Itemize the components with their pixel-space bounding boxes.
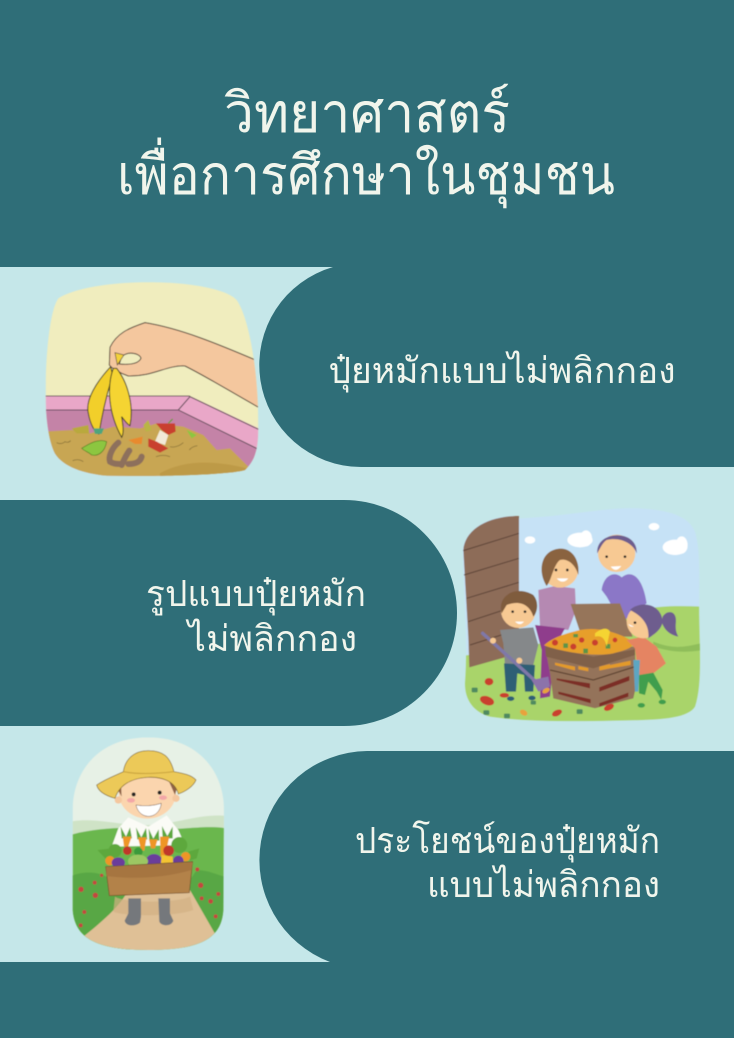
panel: row 1 pill: [259, 267, 734, 467]
text: row 2 label: [146, 573, 366, 659]
text: row 1 label: ปุ๋ยหมักแบบไม่พลิกกอง: [328, 350, 676, 393]
title: [117, 82, 615, 209]
text: row 2 label: รูปแบบปุ๋ยหมัก: [146, 573, 366, 616]
icon: hand dropping banana peel on compost: [45, 282, 259, 477]
text: row 3 label: [355, 820, 660, 905]
text: row 3 label: แบบไม่พลิกกอง: [427, 864, 660, 905]
icon: family at compost bin: [457, 503, 707, 727]
girl: [627, 637, 666, 676]
vegetables: [97, 826, 199, 861]
panel: row 3 pill: [259, 751, 734, 962]
leaves: [479, 678, 615, 718]
title: เพื่อการศึกษาในชุมชน: [117, 137, 615, 209]
crate: [106, 862, 193, 896]
text: row 2 label: ไม่พลิกกอง: [185, 618, 357, 659]
boots: [125, 898, 141, 925]
bin: [571, 603, 633, 637]
icon: farmer holding vegetable crate: [67, 733, 230, 953]
shirt: [112, 815, 185, 847]
title: วิทยาศาสตร์: [224, 82, 510, 144]
hat: [97, 751, 196, 798]
light band: [0, 267, 734, 962]
head: [118, 776, 176, 819]
boy: [500, 627, 538, 665]
text: row 3 label: ประโยชน์ของปุ๋ยหมัก: [355, 820, 660, 863]
panel: row 2 pill: [0, 500, 457, 726]
man: [602, 574, 647, 623]
woman: [538, 586, 576, 630]
